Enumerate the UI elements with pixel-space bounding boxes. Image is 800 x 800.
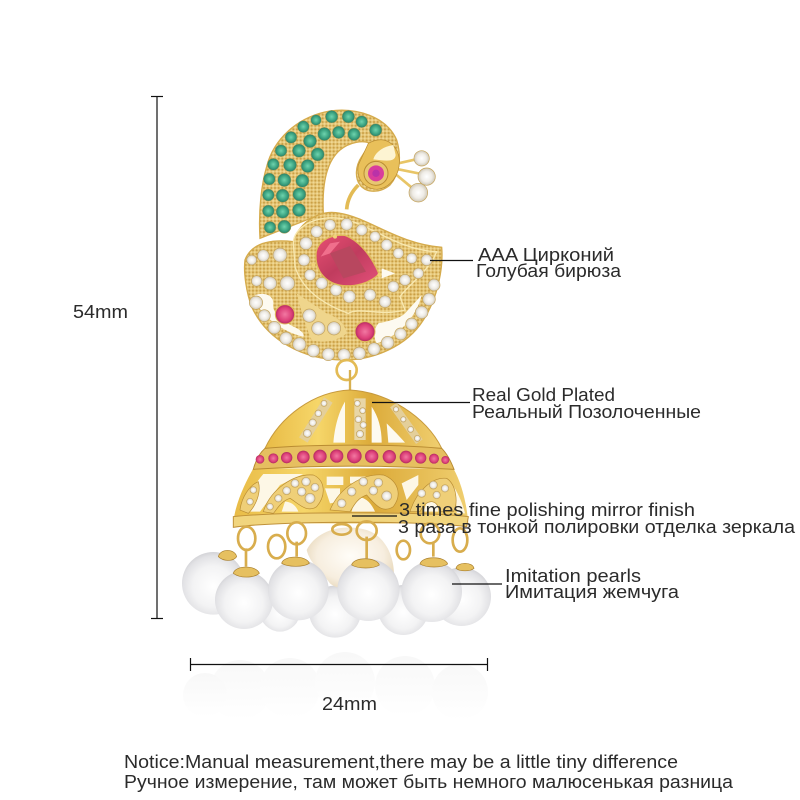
callout: zirconia: AAA Цирконий [478,245,614,265]
baroque centre pearl [307,527,394,591]
height dimension line [151,96,163,618]
pink accent gems [275,305,375,342]
callout: pearls: Имитация жемчуга [505,582,680,602]
height label: 54mm [73,302,128,322]
connecting loop [337,360,357,380]
ruby teardrop [311,235,381,286]
callout: gold plating [372,385,701,422]
callout: polishing [352,500,796,537]
callout: gold plating: Real Gold Plated [472,385,615,405]
dome rib gems [303,400,420,441]
callout: polishing: 3 times fine polishing mirror finish [399,500,695,520]
comb stems [397,158,427,192]
width dimension line [190,658,488,671]
measurement notice [124,752,734,792]
dangling links [238,521,467,567]
eye [364,161,388,185]
comb gems [409,151,435,202]
white gems [247,218,440,361]
neck and tail [260,110,399,238]
measurement notice: Notice:Manual measurement,there may be a little tiny difference [124,752,678,772]
width label: 24mm [322,694,377,714]
body disc [245,212,442,360]
green gems [262,110,382,233]
dome windows [333,402,405,443]
upper dome [265,390,442,448]
callout: pearls [452,566,680,602]
callout: gold plating: Реальный Позолоченные [472,402,701,422]
jhumka bell and pearls [182,370,491,638]
pink gem band [253,445,454,469]
front pearls [215,559,462,629]
lower gems [247,477,449,510]
pink gems [256,449,449,464]
inner wing outline [293,218,437,313]
bottom rim [233,513,468,527]
pearl reflection [183,652,488,720]
callout: zirconia: Голубая бирюза [476,261,622,281]
beak highlight [373,145,396,161]
disc openings [255,268,422,343]
back pearls [182,552,491,638]
lower filigree [240,475,456,513]
callout: zirconia [430,245,622,281]
neck strut [347,185,358,209]
cage openings [245,474,465,513]
pearl caps [218,550,474,577]
peacock pendant [245,110,442,380]
dome ribs [303,398,419,442]
callout: pearls: Imitation pearls [505,566,641,586]
callout: polishing: 3 раза в тонкой полировки отделка зеркала [398,517,796,537]
head gold [358,140,399,189]
lower bell cage [233,468,468,523]
hanger [346,370,353,392]
measurement notice: Ручное измерение, там может быть немного малюсенькая разница [124,772,734,792]
